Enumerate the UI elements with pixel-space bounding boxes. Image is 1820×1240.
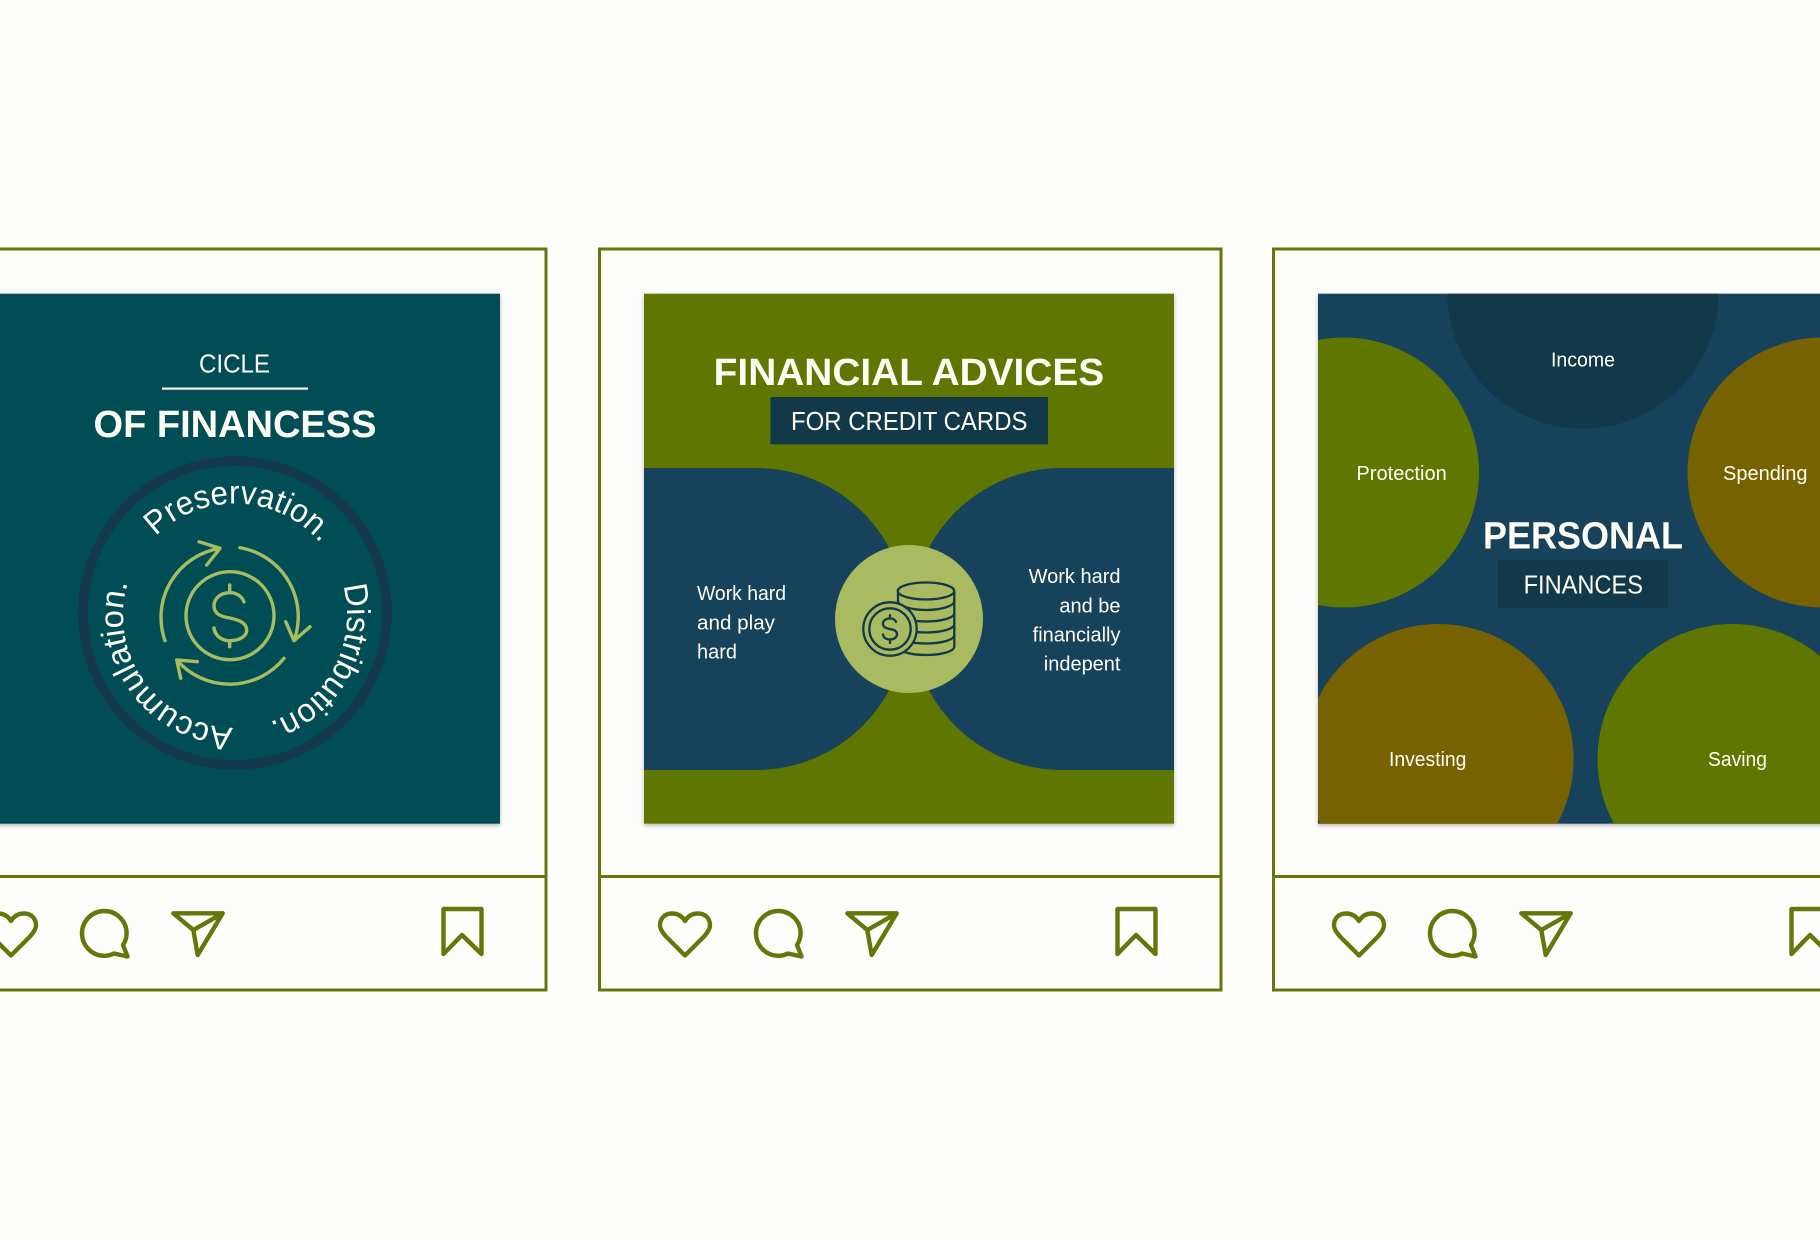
text: work hard and play hard: and play: [697, 612, 775, 634]
action icons: [0, 909, 482, 956]
text: work hard and play hard: Work hard: [697, 583, 786, 605]
icon: comment: [82, 911, 128, 956]
card: cycle of finances: [0, 248, 548, 992]
heading: cicle: CICLE: [199, 348, 270, 378]
circle: investing: [1318, 624, 1574, 824]
card frame: [0, 249, 546, 990]
icon: coin stack: [863, 582, 954, 656]
action icons: [660, 909, 1156, 956]
heading underline: [162, 388, 308, 390]
text: work hard and be financially indepent: Work hard: [1029, 566, 1120, 588]
heading: of financess: OF FINANCESS: [94, 404, 376, 446]
label: saving: Saving: [1708, 749, 1767, 771]
text: work hard and be financially indepent: [1029, 566, 1121, 676]
text: work hard and play hard: hard: [697, 642, 737, 664]
icon: dollar with cycle arrows: [161, 542, 310, 684]
icon: heart: [1334, 914, 1384, 956]
circular label: distribution: Distribution.: [272, 584, 371, 732]
label: protection: Protection: [1356, 463, 1447, 485]
subtitle badge: [1498, 560, 1668, 608]
subtitle badge: FOR CREDIT CARDS: [791, 406, 1028, 436]
subtitle badge: FINANCES: [1524, 570, 1643, 600]
card: personal finances: [1272, 248, 1820, 992]
card frame: [1274, 249, 1820, 990]
center circle: [835, 545, 983, 693]
card frame: [600, 249, 1221, 990]
heading: personal: PERSONAL: [1483, 516, 1683, 558]
text: work hard and be financially indepent: financially: [1033, 624, 1120, 646]
circle: saving: [1598, 624, 1820, 824]
icon: heart: [660, 914, 710, 956]
left blue shape: [644, 468, 907, 770]
label: investing: Investing: [1389, 749, 1466, 771]
heading: financial advices: FINANCIAL ADVICES: [714, 352, 1104, 394]
card: financial advices: [600, 249, 1221, 990]
icon: comment: [756, 911, 802, 956]
icon: bookmark: [1792, 909, 1820, 954]
action icons: [1334, 909, 1820, 956]
icon: send: [173, 913, 223, 955]
circles: [1318, 294, 1820, 824]
subtitle badge: [770, 397, 1048, 444]
label: spending: Spending: [1723, 463, 1808, 485]
label: income: Income: [1551, 350, 1615, 372]
circular label: accumulation: Accumulation.: [100, 584, 233, 750]
right blue shape: [911, 468, 1174, 770]
panel: teal artwork: [0, 294, 500, 824]
icon: bookmark: [1118, 909, 1156, 954]
icon: send: [1521, 913, 1571, 955]
text: work hard and be financially indepent: and be: [1059, 596, 1120, 618]
circle: income: [1447, 294, 1719, 429]
icon: heart: [0, 914, 36, 956]
circle: protection: [1318, 338, 1479, 608]
panel: blue artwork: [1318, 294, 1820, 824]
circular label: preservation: Preservation.: [142, 486, 323, 541]
text: work hard and be financially indepent: indepent: [1044, 654, 1121, 676]
icon: comment: [1430, 911, 1476, 956]
panel: olive artwork: [644, 294, 1174, 824]
ring: [83, 461, 387, 765]
icon: bookmark: [444, 909, 482, 954]
circle: spending: [1688, 338, 1820, 608]
text: work hard and play hard: [697, 583, 786, 664]
icon: send: [847, 913, 897, 955]
